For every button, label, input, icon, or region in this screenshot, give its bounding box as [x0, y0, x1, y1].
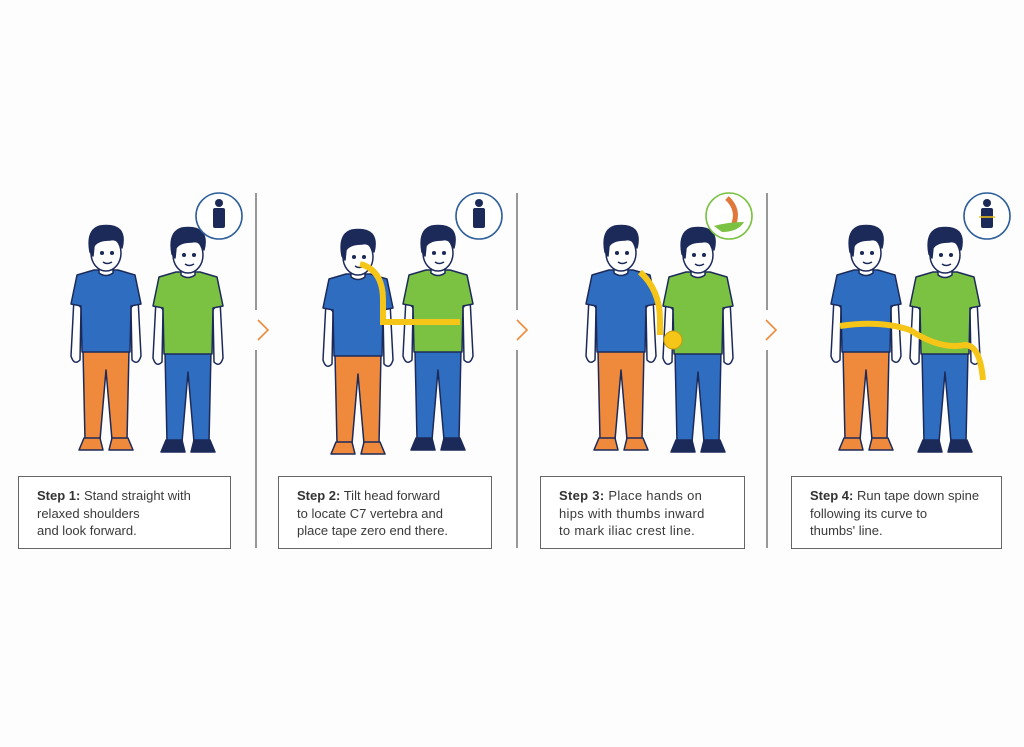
- arrow 1: [258, 320, 268, 340]
- step 2 text: Step 2: Tilt head forward: [297, 488, 440, 503]
- step 3 text: hips with thumbs inward: [559, 506, 705, 520]
- panel 3 figures: [586, 226, 733, 452]
- step 4 text: Step 4: Run tape down spine: [810, 488, 979, 503]
- step 1 text: Step 1: Stand straight with: [37, 488, 191, 503]
- step 1 text: relaxed shoulders: [37, 506, 140, 520]
- step 4 text: thumbs' line.: [810, 523, 883, 538]
- step 1 text: [18, 476, 231, 549]
- step 2 text: [278, 476, 492, 549]
- arrow 2: [517, 320, 527, 340]
- step 4 text: following its curve to: [810, 506, 927, 520]
- step 3 text: [540, 476, 745, 549]
- arrow 3: [766, 320, 776, 340]
- step 3 text: Step 3: Place hands on: [559, 488, 702, 503]
- divider lines: [256, 193, 767, 548]
- icon 3: [706, 193, 752, 239]
- panel 4 figures: [831, 226, 983, 452]
- step 2 text: to locate C7 vertebra and: [297, 506, 443, 520]
- panel 1 figures: [71, 226, 223, 452]
- icon 2: [456, 193, 502, 239]
- icon 4: [964, 193, 1010, 239]
- step 1 text: and look forward.: [37, 523, 137, 538]
- step 2 text: place tape zero end there.: [297, 523, 448, 538]
- step 3 text: to mark iliac crest line.: [559, 523, 695, 538]
- panel 2 figures: [323, 226, 473, 454]
- icon 1: [196, 193, 242, 239]
- step 4 text: [791, 476, 1002, 549]
